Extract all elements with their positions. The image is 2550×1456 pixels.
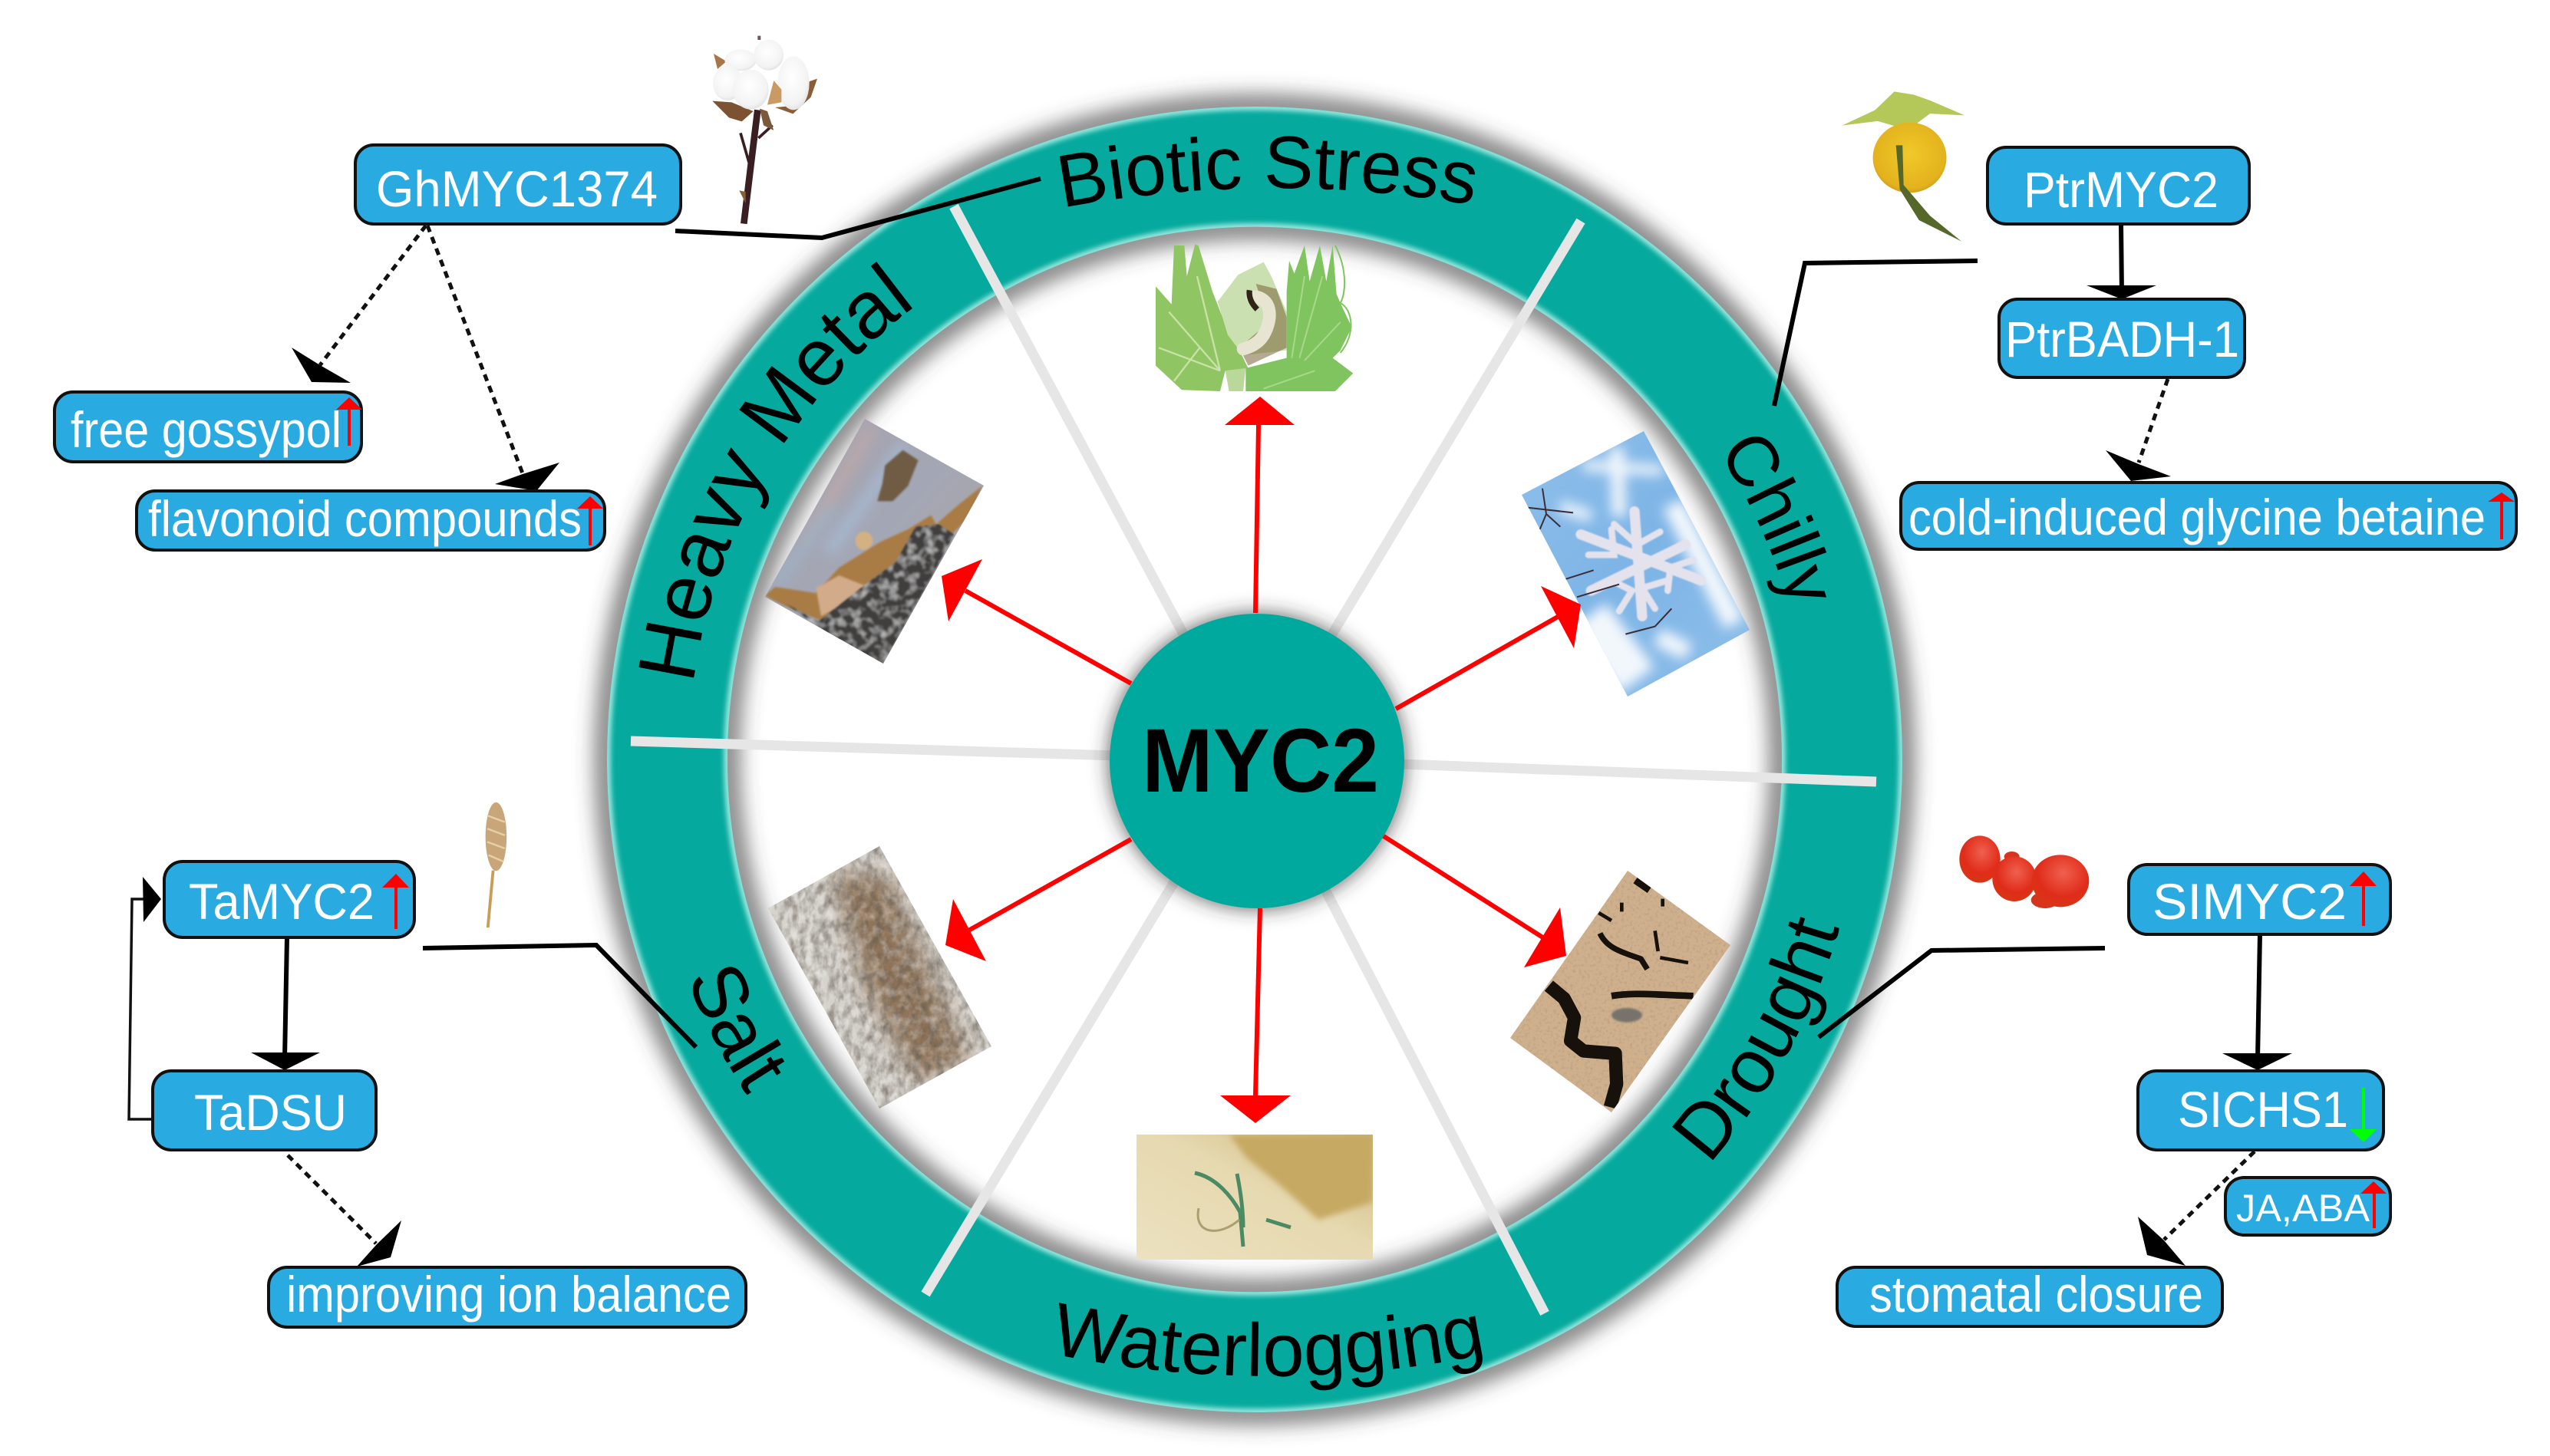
panel: biotic stress pathway: free gossypol — [71, 401, 341, 458]
panel: drought pathway: SICHS1 — [2178, 1081, 2348, 1138]
center node: MYC2 — [1110, 614, 1404, 908]
ring labels: Waterlogging — [1059, 1303, 1483, 1390]
photo: cracked drought soil — [1506, 867, 1734, 1115]
icon: citrus fruit — [1842, 91, 1964, 242]
red arrow: waterlogging — [1220, 908, 1291, 1123]
panel: biotic stress pathway: flavonoid compounds — [148, 490, 582, 547]
panel: biotic stress pathway: GhMYC1374 — [376, 160, 658, 217]
panel: salt pathway: improving ion balance — [286, 1266, 731, 1323]
ring labels: Drought — [1672, 917, 1839, 1160]
ring labels: Heavy Metal — [638, 262, 912, 678]
red arrow: chilly — [1396, 586, 1581, 709]
center node: MYC2: MYC2 — [1142, 710, 1379, 812]
panel: drought pathway: stomatal closure — [1869, 1266, 2203, 1323]
photo: heavy metal polluted ground — [760, 414, 990, 667]
photo: cotton boll with caterpillar — [1156, 244, 1356, 391]
red arrow: drought — [1384, 836, 1566, 967]
panel: chilly pathway — [1774, 147, 2516, 549]
photo: waterlogged seedling — [1136, 1135, 1373, 1260]
red arrow: heavy metal — [942, 559, 1131, 684]
panel: drought pathway: JA,ABA — [2236, 1187, 2370, 1230]
photo: salinized soil — [767, 844, 994, 1112]
ring labels — [638, 136, 1839, 1390]
red arrow: biotic stress — [1225, 397, 1295, 613]
photo: frost snowflake — [1519, 430, 1753, 698]
panel: drought pathway: SIMYC2 — [2152, 873, 2347, 930]
panel: chilly pathway: cold-induced glycine betaine — [1908, 489, 2486, 545]
panel: salt pathway — [129, 861, 746, 1327]
panel: salt pathway: TaMYC2 — [189, 873, 374, 930]
panel: drought pathway — [1819, 865, 2390, 1326]
ring labels: Chilly — [1728, 436, 1826, 598]
panel: chilly pathway: PtrMYC2 — [2024, 161, 2218, 218]
icon: tomatoes — [1959, 835, 2089, 908]
ring labels: Biotic Stress — [1059, 136, 1475, 207]
icon: wheat ear — [486, 802, 506, 927]
sector dividers — [631, 206, 1876, 1313]
red arrow: salt — [945, 839, 1131, 961]
panel: chilly pathway: PtrBADH-1 — [2005, 311, 2239, 367]
icon: cotton plant — [712, 36, 817, 224]
panel: salt pathway: TaDSU — [194, 1084, 347, 1141]
stress wheel ring — [607, 107, 1902, 1412]
panel: biotic stress pathway — [54, 145, 1041, 550]
ring labels: Salt — [692, 967, 784, 1095]
